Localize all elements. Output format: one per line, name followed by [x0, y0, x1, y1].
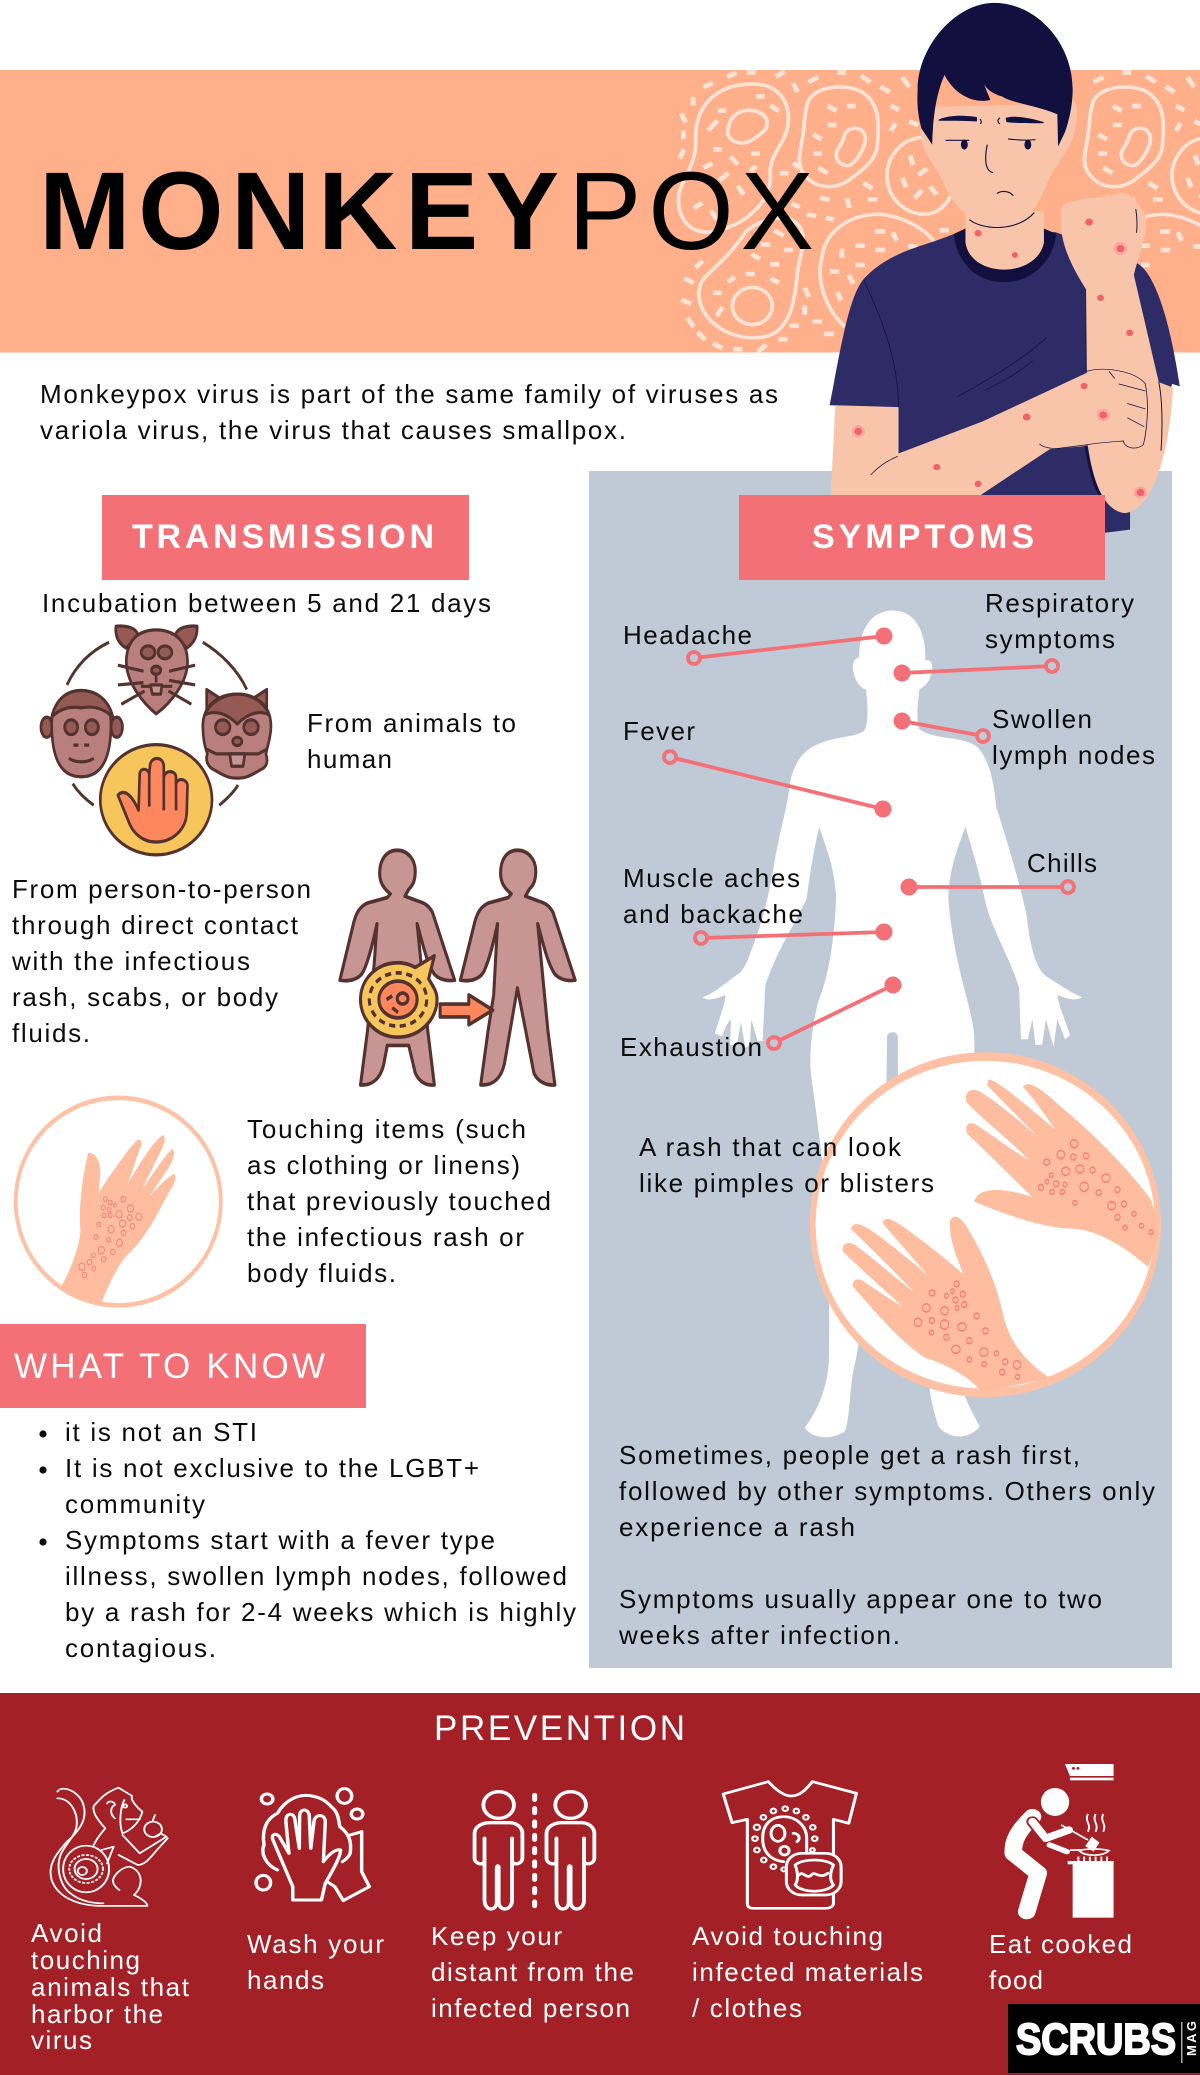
logo: scrubs mag: SCRUBS: [1016, 2015, 1176, 2064]
panel: symptoms background: [589, 471, 1172, 1668]
arrow: [440, 995, 493, 1025]
symptom connector lines: [664, 628, 1074, 1049]
symptoms notes: Symptoms usually appear one to two: [619, 1584, 1102, 1614]
illustration: man with rash: [830, 3, 1180, 533]
symptom labels: Headache: [623, 620, 752, 650]
person one: [340, 850, 455, 1085]
heading: prevention: PREVENTION: [434, 1709, 685, 1748]
prevention captions: harbor the: [31, 1999, 163, 2029]
icon: washing hands: [256, 1789, 369, 1901]
chin line: [969, 212, 1034, 228]
ears: [921, 100, 1077, 166]
prevention captions: animals that: [31, 1972, 190, 2002]
lower hand: [843, 1217, 1050, 1392]
shirt folds: [864, 280, 1086, 408]
neck: [965, 211, 1044, 270]
upper hand: [966, 1079, 1161, 1267]
symptoms notes: followed by other symptoms. Others only: [619, 1476, 1155, 1506]
heading: symptoms: [739, 495, 1105, 580]
text: person to person: [11, 874, 311, 1048]
prevention captions: Avoid touching: [692, 1921, 883, 1951]
list: what to know: Symptoms start with a fever type: [65, 1525, 495, 1555]
text: touching items: [247, 1114, 551, 1288]
heading: what to know: [0, 1324, 366, 1408]
nose, mouth and eyelids: [946, 118, 1036, 196]
icon: cooking person: [1013, 1764, 1114, 1918]
respiratory pointer: [894, 660, 1058, 682]
icon: monkey: [51, 1788, 168, 1906]
symptom labels: and backache: [623, 899, 803, 929]
sores: [852, 242, 1147, 499]
symptom labels: lymph nodes: [992, 740, 1155, 770]
symptom labels: symptoms: [985, 624, 1115, 654]
symptom labels: Exhaustion: [620, 1032, 762, 1062]
upper arm and hand: [831, 370, 1147, 495]
text: from animals: human: [307, 744, 392, 774]
logo: scrubs mag: MAG: [1184, 2021, 1199, 2056]
icon: hand with rash in circle: [16, 1098, 221, 1307]
text: touching items: Touching items (such: [247, 1114, 526, 1144]
heading: transmission: TRANSMISSION: [132, 518, 434, 556]
text: from animals: From animals to: [307, 708, 516, 738]
prevention captions: Avoid: [31, 1918, 102, 1948]
eyes: [961, 140, 968, 150]
panel: prevention: [0, 1693, 1200, 2075]
list: what to know: it is not an STI: [65, 1417, 257, 1447]
symptoms notes: experience a rash: [619, 1512, 855, 1542]
heading: symptoms: SYMPTOMS: [812, 518, 1034, 556]
intro text: [40, 379, 778, 445]
monkey: [41, 690, 122, 777]
rash text: A rash that can look: [639, 1132, 902, 1162]
eyebrows: [939, 116, 1044, 123]
symptoms notes: [618, 1440, 1155, 1650]
prevention captions: food: [989, 1965, 1043, 1995]
shirt: [830, 232, 1180, 533]
rat: [116, 626, 197, 714]
list: what to know: by a rash for 2-4 weeks which is highly: [65, 1597, 576, 1627]
person two: [460, 850, 575, 1085]
fever pointer: [664, 751, 892, 818]
icon: animals to human: [41, 626, 271, 855]
chills pointer: [900, 878, 1074, 896]
rash text: like pimples or blisters: [639, 1168, 934, 1198]
symptoms notes: Sometimes, people get a rash first,: [619, 1440, 1080, 1470]
lymph nodes pointer: [894, 712, 989, 742]
forearm and fist: [1061, 193, 1173, 513]
text: from animals: [307, 708, 516, 774]
list: what to know: community: [65, 1489, 205, 1519]
logo: scrubs mag: [1008, 2004, 1200, 2073]
rash hands circle: [813, 1057, 1161, 1393]
prevention captions: Eat cooked: [989, 1929, 1132, 1959]
text: person to person: through direct contact: [12, 910, 299, 940]
rash text: [639, 1132, 934, 1198]
muscle aches pointer: [695, 924, 892, 944]
prevention captions: infected materials: [692, 1957, 923, 1987]
text: person to person: fluids.: [12, 1018, 90, 1048]
virus bubble: [361, 956, 437, 1037]
face: [921, 104, 1073, 228]
icon: shirt: [723, 1782, 856, 1908]
symptom labels: Fever: [623, 716, 695, 746]
exhaustion pointer: [768, 976, 902, 1049]
stop hand: [100, 745, 212, 855]
prevention captions: infected person: [431, 1993, 630, 2023]
title: [39, 150, 814, 273]
text: touching items: body fluids.: [247, 1258, 396, 1288]
prevention captions: distant from the: [431, 1957, 634, 1987]
heading: transmission: [102, 495, 469, 580]
prevention captions: Keep your: [431, 1921, 562, 1951]
icon: person to person transmission: [340, 850, 575, 1085]
symptom labels: [620, 588, 1155, 1062]
prevention captions: [31, 1918, 1132, 2055]
symptom labels: Chills: [1027, 848, 1097, 878]
title: POX: [568, 150, 814, 273]
text: person to person: with the infectious: [11, 946, 250, 976]
prevention captions: touching: [31, 1945, 140, 1975]
list: what to know: [39, 1417, 576, 1663]
prevention captions: / clothes: [692, 1993, 802, 2023]
banner: [0, 70, 1200, 352]
virus cell pattern: [678, 71, 1200, 352]
title: MONKEY: [39, 150, 559, 273]
prevention captions: virus: [31, 2025, 92, 2055]
list: what to know: contagious.: [65, 1633, 216, 1663]
body silhouette: [703, 611, 1082, 1437]
text: person to person: rash, scabs, or body: [12, 982, 278, 1012]
symptom labels: Muscle aches: [623, 863, 800, 893]
symptom labels: Swollen: [992, 704, 1092, 734]
prevention captions: hands: [247, 1965, 324, 1995]
squirrel: [203, 690, 271, 778]
symptoms notes: weeks after infection.: [618, 1620, 900, 1650]
text: touching items: the infectious rash or: [247, 1222, 524, 1252]
headache pointer: [688, 628, 892, 664]
intro text: variola virus, the virus that causes smallpox.: [40, 415, 626, 445]
heading: what to know: WHAT TO KNOW: [14, 1347, 325, 1386]
list: what to know: illness, swollen lymph nodes, followed: [65, 1561, 567, 1591]
collar: [954, 229, 1056, 282]
list: what to know: It is not exclusive to the LGBT+: [65, 1453, 479, 1483]
text: touching items: as clothing or linens): [247, 1150, 520, 1180]
intro text: Monkeypox virus is part of the same family of viruses as: [40, 379, 778, 409]
hair: [917, 3, 1073, 146]
prevention captions: Wash your: [247, 1929, 384, 1959]
icon: keeping distance: [475, 1792, 594, 1909]
text: person to person: From person-to-person: [12, 874, 311, 904]
symptom labels: Respiratory: [985, 588, 1134, 618]
incubation text: Incubation between 5 and 21 days: [42, 588, 491, 618]
text: touching items: that previously touched: [247, 1186, 551, 1216]
